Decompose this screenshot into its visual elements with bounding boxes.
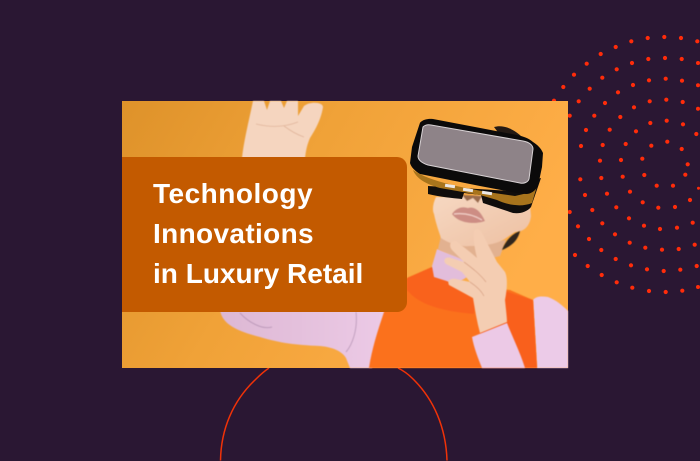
title: Innovations [153, 218, 314, 249]
headset face plate [418, 125, 533, 183]
decorative circle outline [220, 368, 447, 460]
neck [438, 236, 506, 264]
collar [432, 249, 470, 284]
left arm sleeve [220, 310, 386, 368]
orange ribbed vest [369, 267, 537, 368]
title panel [122, 157, 407, 312]
cuff [472, 323, 525, 368]
headset strap [494, 126, 522, 137]
nose shadow [462, 195, 482, 203]
headset lower seal [428, 178, 541, 213]
hair behind ear [502, 231, 520, 250]
photo background [122, 101, 568, 368]
lips [452, 207, 485, 223]
VR headset [410, 119, 543, 213]
title: in Luxury Retail [153, 258, 363, 289]
decorative dot pattern [552, 35, 700, 294]
headset body [410, 119, 543, 194]
title [153, 178, 363, 289]
face [433, 195, 531, 246]
gold trim [413, 170, 537, 205]
hand on chin [444, 229, 507, 333]
raised hand [242, 101, 323, 158]
headset buttons [445, 184, 455, 188]
right shoulder sleeve [533, 296, 568, 368]
title: Technology [153, 178, 313, 209]
photo: woman in VR headset [122, 101, 568, 368]
